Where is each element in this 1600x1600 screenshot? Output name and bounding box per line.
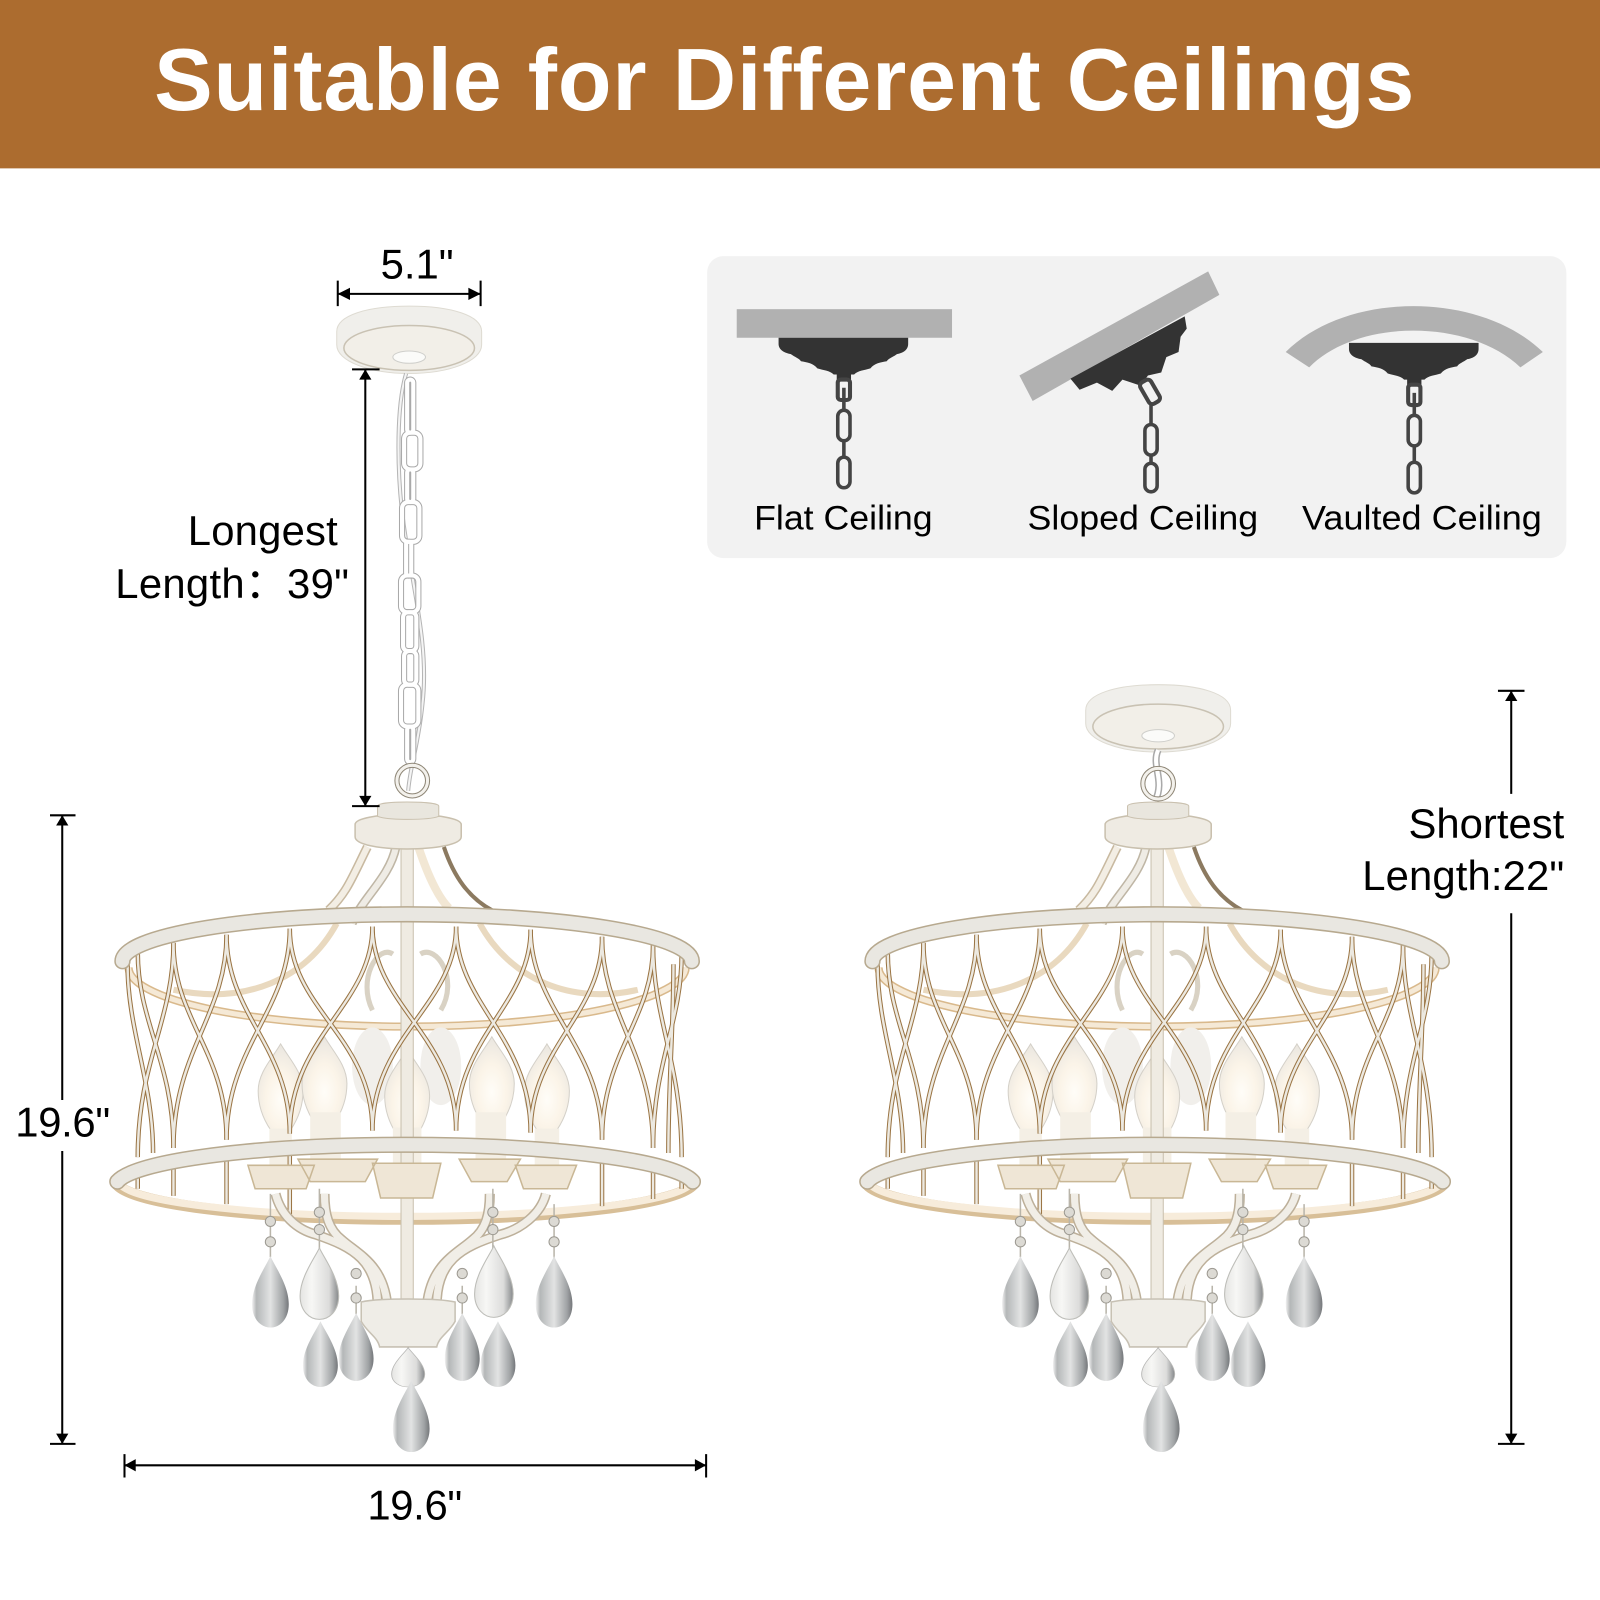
dimension: shortest length [1362, 691, 1565, 1444]
value: 19.6" [15, 1099, 110, 1146]
label: Longest [188, 507, 338, 554]
left chandelier: longest length [116, 306, 694, 1452]
label: vaulted ceiling: Vaulted Ceiling [1302, 500, 1542, 538]
dimension: canopy width [338, 241, 481, 306]
chandelier body [116, 802, 694, 1452]
canopy [337, 306, 482, 373]
hanging link [1143, 750, 1173, 801]
icon: flat ceiling [737, 309, 952, 488]
value: 19.6" [367, 1481, 462, 1528]
dimension: body width [124, 1454, 706, 1528]
value: Length：39" [115, 560, 349, 607]
canopy [1086, 685, 1231, 752]
value: Length:22" [1362, 852, 1564, 899]
label: flat ceiling: Flat Ceiling [754, 500, 933, 538]
label: sloped ceiling: Sloped Ceiling [1028, 500, 1258, 538]
title banner [0, 0, 1600, 168]
chain and cable [397, 373, 428, 796]
dimension: body height [15, 815, 110, 1444]
panel: ceiling types [707, 256, 1566, 558]
title: Suitable for Different Ceilings [154, 31, 1414, 129]
right chandelier: shortest length [866, 685, 1444, 1452]
label: Shortest [1409, 800, 1565, 847]
dimension: longest chain length [115, 369, 380, 806]
chandelier body [866, 802, 1444, 1452]
value: 5.1" [381, 241, 454, 288]
icon: vaulted ceiling [1286, 306, 1543, 493]
icon: sloped ceiling [1019, 271, 1219, 492]
